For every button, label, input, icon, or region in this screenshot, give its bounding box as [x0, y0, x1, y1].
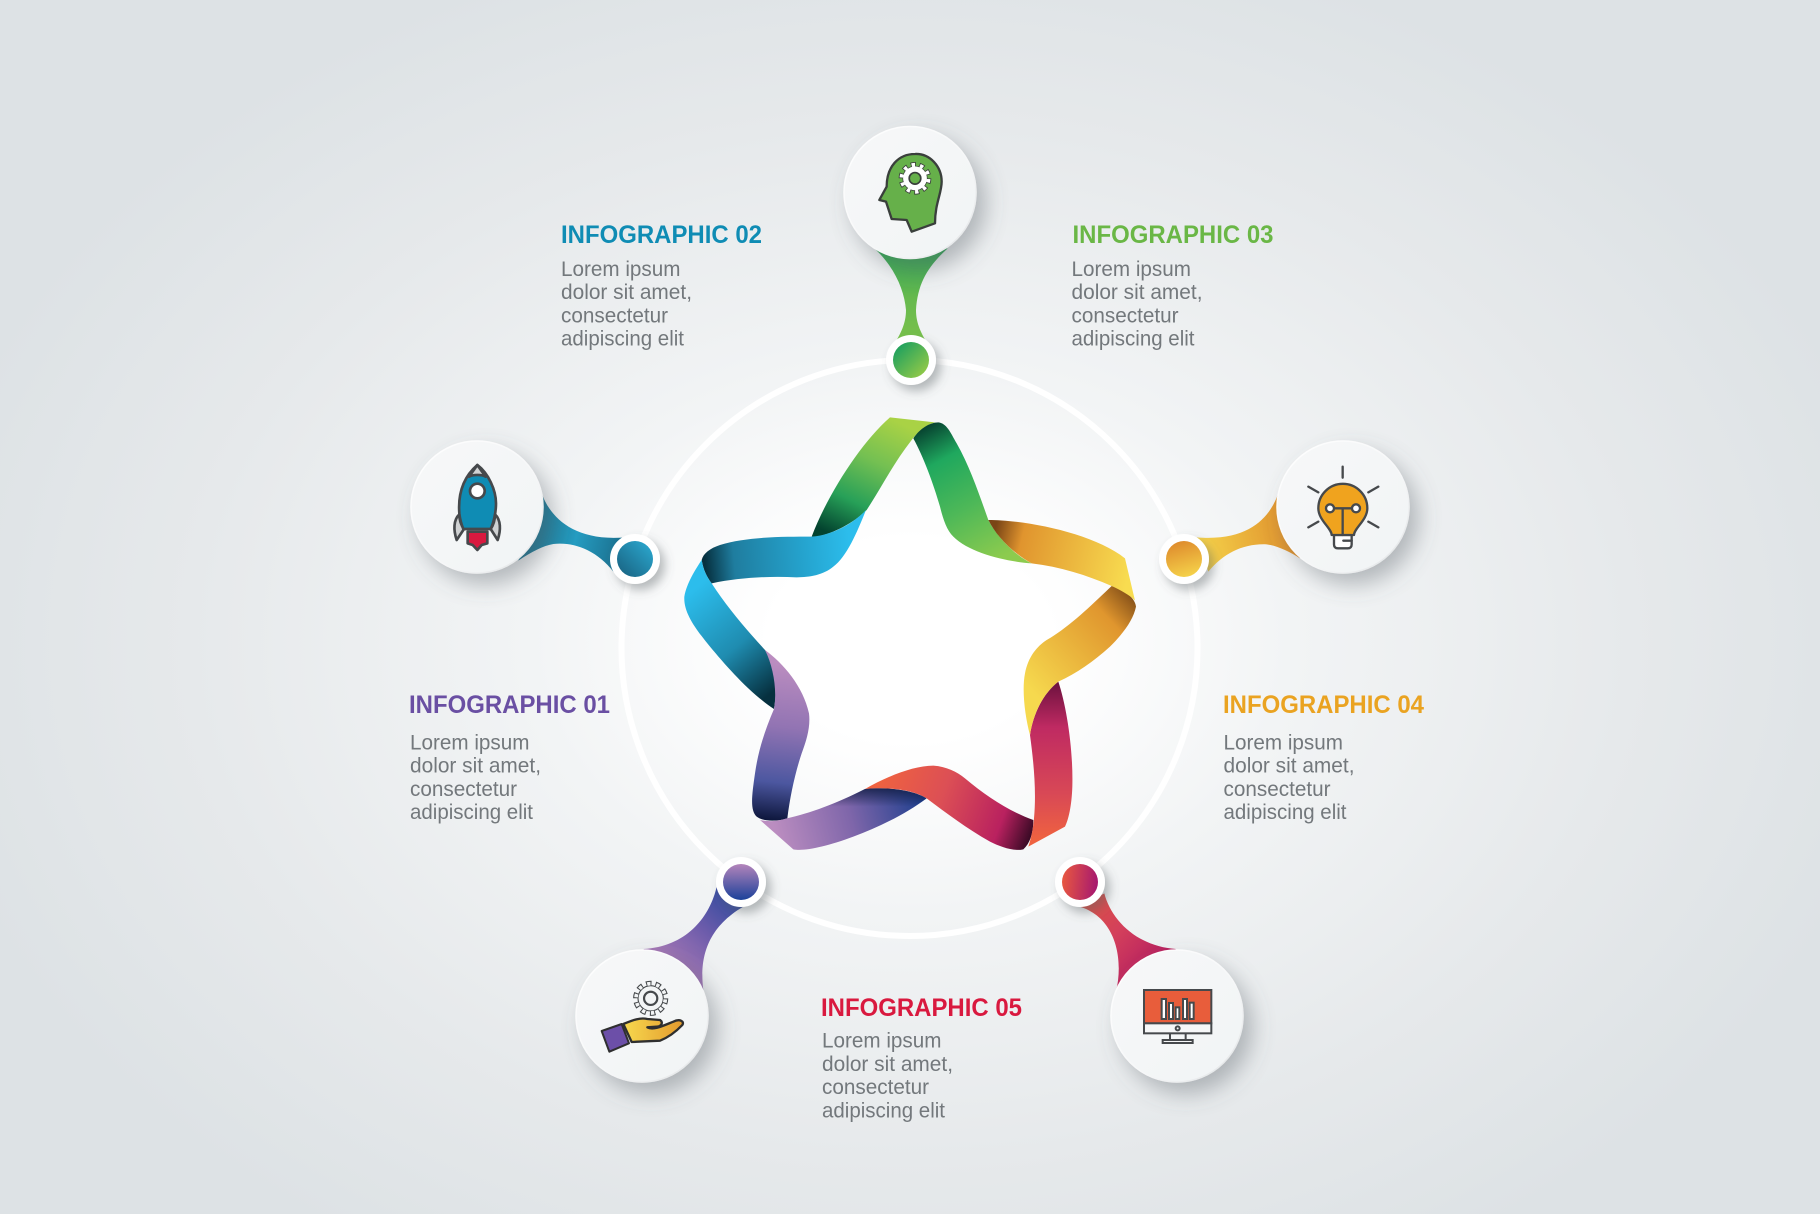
text block: infographic 03: INFOGRAPHIC 03 — [1072, 221, 1274, 249]
text block: infographic 05 — [821, 994, 1022, 1122]
connector: infographic 03 green — [874, 248, 948, 347]
text block: infographic 02: INFOGRAPHIC 02 — [561, 221, 762, 249]
ribbon: left cyan — [684, 560, 776, 709]
central ring — [622, 360, 1198, 936]
ribbon: top right green — [913, 422, 1032, 563]
icon: hand with gear — [602, 984, 683, 1052]
ribbon: left teal — [702, 510, 866, 583]
connector: infographic 05 crimson — [1079, 893, 1176, 992]
ribbon star — [684, 417, 1136, 850]
text block: infographic 01: consectetur — [410, 778, 517, 801]
text block: infographic 04: Lorem ipsum — [1224, 732, 1343, 754]
text block: infographic 04 — [1223, 691, 1424, 824]
icon disc: monitor — [1111, 950, 1243, 1082]
ribbon: top right yellow — [988, 520, 1135, 601]
icon disc: head — [844, 126, 976, 258]
icon disc: rocket — [411, 441, 543, 573]
text block: infographic 01: dolor sit amet, — [410, 755, 541, 778]
ribbon: top left green — [812, 417, 935, 537]
ribbon: bottom right red — [865, 766, 1033, 850]
text block: infographic 03 — [1072, 221, 1274, 350]
text block: infographic 04: INFOGRAPHIC 04 — [1223, 691, 1424, 719]
ribbon: right amber — [1024, 586, 1136, 735]
text block: infographic 04: dolor sit amet, — [1224, 755, 1354, 778]
connector: infographic 04 orange — [1197, 493, 1300, 572]
text block: infographic 05: dolor sit amet, — [822, 1053, 953, 1076]
node: purple — [716, 857, 766, 907]
text block: infographic 01: adipiscing elit — [410, 801, 533, 824]
icon disc: hand — [576, 950, 708, 1082]
icon: monitor with bars — [1144, 990, 1211, 1043]
text block: infographic 05: consectetur — [822, 1076, 929, 1099]
ribbon: lower left purple — [752, 650, 809, 821]
text block: infographic 01: Lorem ipsum — [410, 732, 530, 754]
text block: infographic 03: Lorem ipsum — [1072, 258, 1191, 281]
icon disc: bulb — [1277, 441, 1409, 573]
text block: infographic 02: Lorem ipsum — [561, 258, 680, 281]
text block: infographic 04: adipiscing elit — [1224, 801, 1347, 824]
node: crimson — [1055, 857, 1105, 907]
ribbon: bottom left violet — [760, 788, 927, 850]
text block: infographic 02: consectetur — [561, 304, 668, 328]
icon: head with gear — [879, 154, 942, 232]
text block: infographic 03: adipiscing elit — [1072, 328, 1195, 350]
ribbon: right crimson — [1028, 682, 1072, 847]
node: green — [886, 335, 936, 385]
text block: infographic 04: consectetur — [1224, 778, 1331, 801]
icon: rocket — [454, 465, 500, 550]
node: blue — [610, 534, 660, 584]
text block: infographic 05: adipiscing elit — [822, 1099, 945, 1122]
text block: infographic 02: dolor sit amet, — [561, 281, 692, 304]
text block: infographic 02: adipiscing elit — [561, 328, 684, 350]
text block: infographic 03: consectetur — [1072, 304, 1179, 328]
text block: infographic 05: Lorem ipsum — [822, 1030, 942, 1053]
connector: infographic 02 blue — [518, 493, 625, 572]
text block: infographic 03: dolor sit amet, — [1072, 281, 1202, 304]
icon: light bulb — [1308, 467, 1378, 548]
text block: infographic 02 — [561, 221, 762, 350]
node: orange — [1159, 534, 1209, 584]
text block: infographic 01 — [409, 691, 610, 824]
text block: infographic 01: INFOGRAPHIC 01 — [409, 691, 610, 719]
text block: infographic 05: INFOGRAPHIC 05 — [821, 994, 1022, 1022]
connector: infographic 01 purple — [643, 887, 743, 990]
